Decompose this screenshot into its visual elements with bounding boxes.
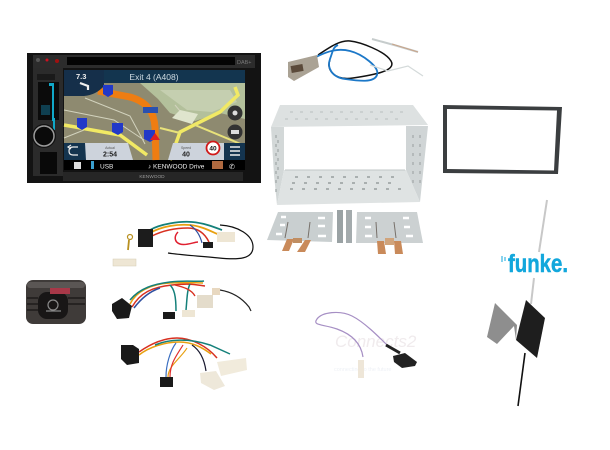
DAB connector lead [316, 312, 417, 378]
navigation screen: ✆ [229, 163, 235, 171]
wiring harness top [113, 222, 253, 266]
DAB antenna [487, 200, 547, 406]
navigation screen: 7.3 [76, 72, 86, 81]
navigation screen: 2:54 [103, 152, 117, 158]
head unit: Kenwood navigation stereo: DAB+ [237, 60, 252, 66]
DAB connector lead: connecting to the future [334, 367, 391, 373]
black trim frame [443, 105, 562, 174]
navigation screen: ♪ KENWOOD Drive [148, 164, 205, 170]
head unit: Kenwood navigation stereo [27, 53, 261, 183]
metal mounting cage [271, 105, 428, 205]
navigation screen: 40 [182, 152, 190, 158]
wiring harness bottom [121, 338, 247, 390]
navigation screen: Exit 4 (A408) [129, 72, 179, 82]
mounting brackets [267, 210, 423, 254]
navigation screen: 40 [209, 146, 217, 152]
navigation screen: Actual [105, 146, 115, 150]
navigation screen: USB [100, 164, 113, 170]
antenna adapter cable [288, 39, 423, 81]
funke logo: funke. [508, 250, 568, 278]
wiring harness middle [112, 281, 251, 319]
navigation screen: Speed [181, 146, 191, 150]
steering wheel interface module [26, 280, 86, 324]
navigation screen [64, 70, 245, 171]
head unit: Kenwood navigation stereo: KENWOOD [139, 174, 165, 180]
DAB connector lead: Connects2 [335, 332, 417, 351]
